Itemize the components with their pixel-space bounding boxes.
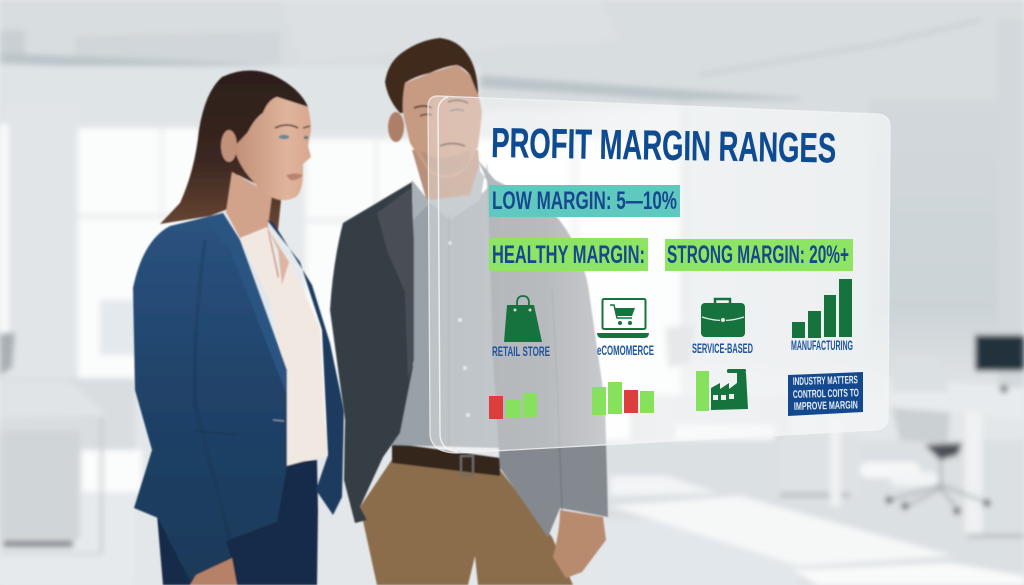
woman lips	[286, 174, 303, 180]
icon: briefcase	[701, 299, 745, 337]
woman face	[234, 97, 311, 200]
woman neck and chest	[226, 172, 280, 280]
man hair	[385, 38, 478, 113]
right cabinet	[780, 434, 860, 496]
icon: rising bars	[792, 279, 852, 338]
man blazer left	[330, 182, 413, 523]
icon: laptop with cart	[597, 299, 649, 338]
man ear	[388, 112, 404, 142]
label: low margin: LOW MARGIN: 5—10%	[492, 187, 677, 215]
woman blazer right side	[267, 220, 344, 515]
callout: industry matters: CONTROL COITS TO	[793, 387, 859, 401]
callout: industry matters: IMPROVE MARGIN	[794, 399, 858, 413]
label: ecommerce: eCOMOMERCE	[597, 343, 654, 358]
woman blouse	[240, 227, 327, 466]
lower wall	[0, 378, 135, 450]
woman eye and brow	[275, 125, 310, 139]
chart: ecommerce mini bars	[592, 382, 654, 415]
man neck	[412, 150, 482, 205]
label: service-based: SERVICE-BASED	[692, 341, 753, 356]
person: man in grey blazer	[330, 38, 608, 585]
woman ear	[221, 130, 237, 162]
man trousers	[360, 458, 573, 585]
floor	[0, 450, 135, 585]
man belt	[392, 443, 500, 476]
chart: retail mini bars	[489, 393, 537, 419]
label: low margin	[489, 185, 680, 217]
woman lapel	[207, 213, 287, 395]
title: PROFIT MARGIN RANGES	[491, 119, 837, 171]
man hand	[553, 510, 606, 578]
label: manufacturing: MANUFACTURING	[791, 338, 853, 353]
icon: shopping bag	[504, 296, 542, 342]
right desk	[885, 378, 1024, 420]
icon: factory with green bar	[696, 369, 748, 411]
man shirt placket	[448, 215, 470, 445]
glass sheet	[428, 96, 890, 453]
man eyes and mouth	[414, 100, 468, 146]
left desk and cabinet	[0, 381, 107, 418]
back wall	[0, 66, 480, 131]
callout: industry matters: INDUSTRY MATTERS	[793, 374, 858, 388]
label: healthy margin: HEALTHY MARGIN:	[492, 241, 645, 269]
man stubble shading	[420, 150, 470, 175]
windows	[0, 124, 8, 354]
woman blazer shading	[195, 240, 284, 540]
man lapel	[377, 188, 414, 380]
panel: glass profit margin panel	[428, 96, 890, 453]
woman hair	[160, 70, 308, 230]
woman blazer	[133, 213, 287, 581]
panel background objects	[665, 325, 695, 368]
label: strong margin: STRONG MARGIN: 20%+	[667, 241, 849, 269]
label: strong margin	[665, 239, 853, 271]
monitor	[975, 335, 1024, 371]
man blazer right	[478, 160, 608, 537]
man sleeve seam	[552, 290, 562, 510]
panel inner edge highlight	[438, 97, 458, 452]
label: healthy margin	[489, 238, 648, 271]
man shirt	[392, 185, 500, 448]
woman hand	[190, 558, 237, 585]
label: retail store: RETAIL STORE	[492, 344, 550, 359]
ceiling	[0, 0, 1024, 110]
callout: industry matters	[788, 372, 863, 416]
chair	[892, 356, 950, 392]
man collar	[412, 163, 490, 220]
man face	[403, 65, 482, 178]
person: woman in navy blazer	[133, 70, 344, 585]
woman trousers	[157, 460, 318, 585]
